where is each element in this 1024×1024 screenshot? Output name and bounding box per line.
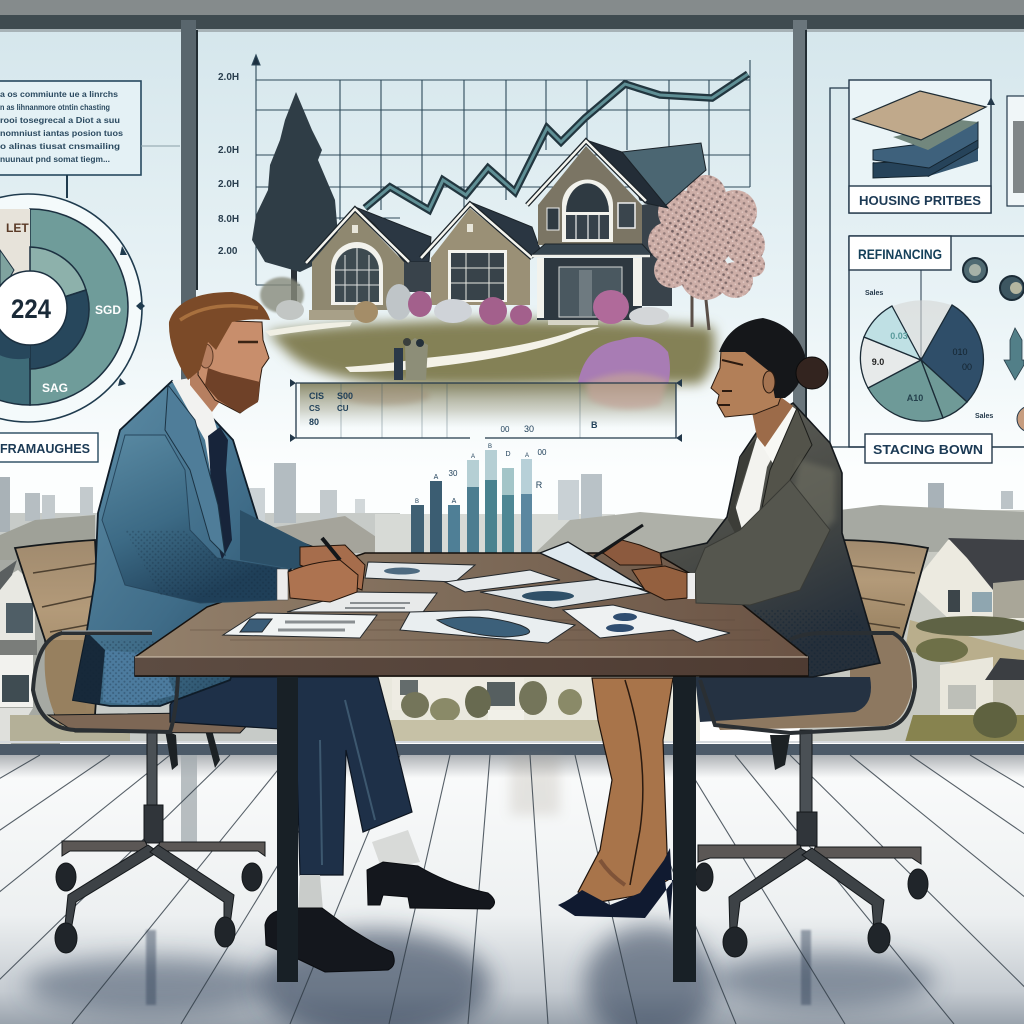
notes box: rooi tosegrecal a Diot a suu	[0, 115, 120, 125]
dimension bracket: S00	[337, 391, 353, 401]
woman torso	[660, 318, 880, 722]
right panel: housing and refinancing	[830, 80, 1024, 463]
chair back	[842, 540, 928, 640]
sleeve	[695, 480, 830, 605]
man legs and shoes	[170, 677, 495, 972]
notes box: n as Iihnanmore otntin chasting	[0, 102, 110, 112]
table legs	[277, 676, 696, 982]
people	[394, 338, 428, 380]
donut chart: LET	[6, 221, 29, 235]
bushes	[276, 284, 670, 409]
highlight	[790, 460, 835, 540]
man torso	[73, 292, 313, 706]
dimension bracket: 80	[309, 417, 319, 427]
bar chart: R	[536, 480, 543, 490]
lapel	[165, 385, 225, 555]
front hand	[632, 566, 687, 600]
woman legs and shoes	[558, 678, 673, 921]
neck	[190, 350, 232, 412]
cityscape center	[300, 474, 735, 742]
tree dark	[252, 92, 338, 313]
cityscape left	[0, 463, 400, 745]
blazer body	[660, 403, 880, 677]
window frame	[0, 0, 1024, 430]
dimension bracket: CIS	[309, 391, 324, 401]
axis labels	[218, 72, 239, 257]
houses right	[905, 538, 1024, 742]
refinancing card	[849, 236, 1024, 463]
axis labels: 2.0H	[218, 72, 239, 83]
axis labels: 2.00	[218, 246, 238, 257]
right chair	[695, 540, 928, 957]
refinancing card: 9.0	[872, 357, 884, 367]
dimension bracket: B	[591, 420, 598, 430]
refinancing card: A10	[907, 393, 923, 403]
chair base	[695, 730, 928, 957]
axis labels: 2.0H	[218, 145, 239, 156]
back sleeve	[240, 510, 313, 570]
house left	[306, 207, 431, 320]
dimension bracket: CU	[337, 404, 349, 413]
back hand	[603, 540, 662, 565]
trousers	[170, 677, 412, 875]
housing prices card: HOUSING PRITBES	[859, 193, 981, 208]
bar chart: A	[525, 453, 529, 459]
right chair tube	[700, 633, 915, 733]
blouse	[733, 405, 797, 563]
woman head	[711, 318, 828, 417]
donut chart: SGD	[95, 303, 121, 317]
bar chart: 00	[538, 448, 547, 457]
jacket body	[73, 381, 313, 706]
left chair	[15, 540, 265, 953]
pen	[594, 525, 643, 557]
front shoe	[367, 862, 495, 909]
skirt	[695, 677, 871, 722]
financing label: FRAMAUGHES	[0, 441, 90, 456]
bar chart: 00	[501, 425, 510, 434]
bar chart: 30	[524, 424, 534, 434]
financing label	[0, 433, 98, 462]
sleeve	[102, 435, 280, 603]
side card	[1007, 96, 1024, 206]
notes box: nomniust iantas posion tuos	[0, 128, 123, 138]
dimension bracket: CS	[309, 404, 321, 413]
trend line	[365, 74, 748, 210]
donut chart	[0, 194, 145, 422]
donut chart: 224	[11, 294, 51, 324]
notes box: a os commiunte ue a Iinrchs	[0, 89, 118, 99]
held paper	[540, 542, 647, 590]
refinancing card: REFINANCING	[858, 246, 942, 262]
chart grid	[252, 55, 750, 285]
tie	[208, 427, 232, 560]
cityscape right	[800, 483, 1024, 742]
shoe	[558, 848, 673, 921]
notes box	[0, 81, 141, 175]
pen	[322, 538, 340, 560]
refinancing card: 0.03	[890, 331, 908, 341]
center panel: price chart	[218, 55, 765, 553]
houses	[306, 140, 706, 325]
refinancing card: Sales	[975, 413, 993, 420]
lapels	[728, 437, 757, 565]
dimension bracket	[290, 379, 682, 442]
axis labels: 8.0H	[218, 214, 239, 225]
house far left	[0, 560, 37, 745]
neck	[752, 395, 793, 447]
chair base	[55, 730, 265, 953]
bar chart: D	[505, 451, 511, 458]
donut chart: SAG	[42, 381, 68, 395]
front hand	[288, 560, 358, 602]
axis labels: 2.0H	[218, 179, 239, 190]
bar chart	[411, 424, 547, 553]
floor	[0, 741, 1024, 1024]
house mid	[421, 202, 541, 305]
refinancing card: STACING BOWN	[873, 442, 983, 457]
left chair tube	[33, 633, 178, 732]
notes box: nuunaut pnd somat tiegm...	[0, 154, 110, 164]
chair back	[15, 540, 100, 715]
ground	[265, 320, 715, 428]
bar chart: B	[488, 444, 492, 450]
bar chart: A	[452, 498, 457, 505]
front sock	[372, 830, 420, 870]
woman front arm	[594, 480, 830, 605]
left panel: financing donut and notes	[0, 81, 180, 462]
cuff	[277, 569, 288, 600]
window background	[0, 0, 1024, 760]
shirt	[172, 378, 228, 500]
refinancing card: 00	[962, 362, 972, 372]
back sock	[298, 875, 323, 912]
refinancing card: 010	[952, 347, 968, 357]
table leg and chair tube layer	[33, 631, 915, 982]
documents	[223, 562, 730, 643]
bar chart: A	[471, 454, 475, 460]
bar chart: 30	[449, 469, 458, 478]
table	[135, 542, 808, 676]
man head	[169, 292, 270, 413]
notes box: o alinas tiusat cnsmailing	[0, 141, 120, 151]
back hand	[300, 545, 365, 590]
bar chart: A	[434, 474, 439, 481]
house big	[527, 140, 706, 325]
cuff	[687, 573, 695, 599]
man front arm	[102, 435, 365, 603]
refinancing card: Sales	[865, 290, 883, 297]
bar chart: B	[415, 499, 419, 505]
pie chart	[860, 305, 983, 421]
housing prices card	[849, 80, 995, 213]
pink tree	[642, 175, 765, 330]
back shoe	[265, 908, 394, 972]
